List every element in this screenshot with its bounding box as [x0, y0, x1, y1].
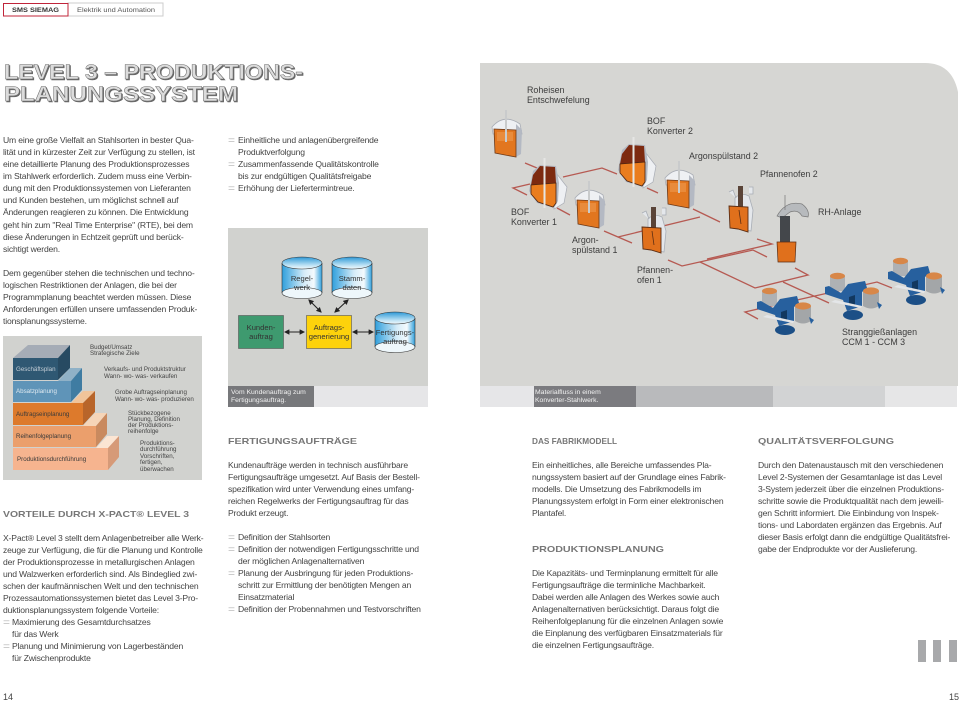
plant labels: Argon-	[572, 235, 599, 245]
text block: Produktionsplanung: Dabei werden alle Anlagen des Werkes sowie auch	[532, 592, 720, 602]
text block: Fabrikmodell: Plantafel.	[532, 508, 566, 518]
title	[4, 61, 303, 106]
text block: Vorteile: =	[3, 641, 10, 651]
plant labels: Konverter 2	[647, 126, 693, 136]
text block: intro: geht hin zum "Real Time Enterprise" (RTE), bei dem	[3, 220, 193, 230]
text block: Qualitätsverfolgung: tions- und Labordaten ergänzen das Ergebnis. Auf	[758, 520, 942, 530]
text block: Vorteile: für Zwischenprodukte	[12, 653, 91, 663]
text block: Produktionsplanung: Fertigungsaufträge die terminliche Machbarkeit.	[532, 580, 706, 590]
vessel: BOF Konverter 2	[618, 137, 656, 188]
text block: Qualitätsverfolgung: schritte sowie die Produktqualität nach dem jeweili-	[758, 496, 944, 506]
text block: Vorteile: Prozessautomationssystemen bietet das Level 3-Pro-	[3, 593, 198, 603]
step: Geschäftsplan: Geschäftsplan	[16, 366, 56, 373]
cylinder: Regelwerk	[282, 257, 322, 298]
vessel: RH-Anlage	[777, 195, 808, 262]
text block: Qualitätsverfolgung	[758, 460, 951, 554]
labels: planning levels: Wann- wo- was- produzieren	[115, 396, 194, 403]
heading: Qualitätsverfolgung: QUALITÄTSVERFOLGUNG	[758, 436, 894, 446]
text block: Fertigungsaufträge: spezifikation wird unter Verwendung eines umfang-	[228, 484, 414, 494]
text block: intro: Änderungen reagieren zu können. Die Entwicklung	[3, 207, 189, 217]
text block: Fertigungsaufträge: Definition der Probennahmen und Testvorschriften	[238, 604, 421, 614]
step: Reihenfolgeplanung	[13, 413, 107, 447]
plant labels: Konverter 1	[511, 217, 557, 227]
text block: intro: lität und in kürzester Zeit zur Verfügung zu stellen, ist	[3, 147, 196, 157]
box: Auftragsgenerierung	[306, 316, 352, 348]
plant labels: Roheisen	[527, 85, 565, 95]
text block: Vorteile: duktionsplanungssystem folgende Vorteile:	[3, 605, 159, 615]
text block: Fabrikmodell: Planungssystem erfolgt in Form einer elektronischen	[532, 496, 724, 506]
plant labels: RH-Anlage	[818, 207, 861, 217]
cylinder: Fertigungsauftrag: Fertigungs-	[376, 328, 415, 337]
text block: restrictions: tionsplanungssysteme.	[3, 316, 87, 326]
text block: Fertigungsaufträge: =	[228, 604, 235, 614]
material flow lines	[513, 163, 892, 319]
caption: material flow: Materialfluss in einem	[535, 389, 601, 396]
labels: planning levels: fertigen,	[140, 459, 163, 466]
step: Geschäftsplan	[13, 345, 70, 380]
text block: benefits list: =	[228, 135, 235, 145]
text block: Fabrikmodell: Ein einheitliches, alle Bereiche umfassendes Pla-	[532, 460, 712, 470]
cylinder: Regelwerk: Regel-	[291, 274, 314, 283]
text block: Fabrikmodell: modells. Die Umsetzung des Fabrikmodells im	[532, 484, 701, 494]
text block: Produktionsplanung: die Einplanung des verfügbaren Einsatzmaterials für	[532, 628, 723, 638]
text block: Produktionsplanung: Die Kapazitäts- und Terminplanung ermittelt für alle	[532, 568, 718, 578]
caster: CCM 2	[825, 273, 882, 320]
step: Auftragseinplanung	[13, 391, 95, 425]
vessel: BOF Konverter 1	[529, 158, 567, 209]
step: Absatzplanung	[13, 368, 82, 402]
labels: planning levels: reihenfolge	[128, 428, 159, 435]
text block: intro: und Kunden bestehen, um möglichst schnell auf	[3, 195, 179, 205]
text block: intro: im Stahlwerk erforderlich. Zudem muss eine Verbin-	[3, 171, 192, 181]
text block: Qualitätsverfolgung: 3-System jederzeit über die einzelnen Produktions-	[758, 484, 944, 494]
heading: Produktionsplanung: PRODUKTIONSPLANUNG	[532, 545, 664, 554]
labels: planning levels: durchführung	[140, 446, 177, 453]
text block: Fertigungsaufträge: Definition der notwendigen Fertigungsschritte und	[238, 544, 419, 554]
labels: planning levels: Stückbezogene	[128, 410, 171, 417]
text block: intro: eine detaillierte Planung des Produktionsprozesses	[3, 159, 189, 169]
step: Absatzplanung: Absatzplanung	[16, 388, 57, 395]
labels: planning levels: Wann- wo- was- verkaufen	[104, 373, 178, 380]
text block: benefits list: Einheitliche und anlagenübergreifende	[238, 135, 379, 145]
labels: planning levels	[90, 344, 194, 473]
text block: benefits list: Zusammenfassende Qualitätskontrolle	[238, 159, 379, 169]
vessel: Roheisen Entschwefelung	[492, 110, 522, 157]
box: Kundenauftrag: auftrag	[249, 332, 273, 341]
text block: Vorteile: =	[3, 617, 10, 627]
vessel: Pfannenofen 2	[729, 186, 753, 232]
text block: Fertigungsaufträge: der möglichen Anlagenalternativen	[238, 556, 365, 566]
text block: Fertigungsaufträge: Produkt erzeugt.	[228, 508, 288, 518]
text block: Fertigungsaufträge: Planung der Ausbringung für jeden Produktions-	[238, 568, 413, 578]
text block: intro: diese Änderungen in Echtzeit geprüft und berück-	[3, 232, 184, 242]
text block: benefits list: Erhöhung der Liefertermintreue.	[238, 183, 355, 193]
text block: Vorteile: der Produktionsprozesse in metallurgischen Anlagen	[3, 557, 195, 567]
text block: benefits list: =	[228, 183, 235, 193]
text block: Vorteile: schen der kaufmännischen Welt und den technischen	[3, 581, 199, 591]
text block: Fertigungsaufträge: Einsatzmaterial	[238, 592, 294, 602]
text block: Fertigungsaufträge: =	[228, 544, 235, 554]
plant labels	[511, 85, 917, 347]
step: Auftragseinplanung: Auftragseinplanung	[16, 411, 70, 418]
text block: Vorteile: und Walzwerken erforderlich sind. Als Bindeglied zwi-	[3, 569, 197, 579]
text block: Fertigungsaufträge: Definition der Stahlsorten	[238, 532, 330, 542]
labels: planning levels: der Produktions-	[128, 422, 173, 429]
text block: benefits list: Produktverfolgung	[238, 147, 305, 157]
text block: intro	[3, 135, 196, 254]
text block: Vorteile: zeuge zur Verfügung, die für die Planung und Kontrolle	[3, 545, 203, 555]
text block: Vorteile: für das Werk	[12, 629, 59, 639]
arrows between nodes	[285, 300, 373, 332]
plant labels: Pfannenofen 2	[760, 169, 818, 179]
step: Reihenfolgeplanung: Reihenfolgeplanung	[16, 433, 72, 440]
text block: benefits list: bis zur endgültigen Qualitätsfreigabe	[238, 171, 372, 181]
box: Kundenauftrag: Kunden-	[247, 323, 276, 332]
text block: benefits list: =	[228, 159, 235, 169]
heading: Das Fabrikmodell: DAS FABRIKMODELL	[532, 437, 617, 446]
text block: Fertigungsaufträge: =	[228, 568, 235, 578]
text block: Vorteile	[3, 533, 204, 663]
text block: Fertigungsaufträge: reichen Regelwerks der Fertigungsauftrag für das	[228, 496, 409, 506]
text block: Qualitätsverfolgung: gabe der Endprodukte vor der Auslieferung.	[758, 544, 917, 554]
page number 15: 15	[949, 692, 959, 702]
box: Auftragsgenerierung: generierung	[309, 332, 349, 341]
text block: Qualitätsverfolgung: dieser Basis erfolgt dann die endgültige Qualitätsfrei-	[758, 532, 951, 542]
panel: order generation diagram	[228, 228, 428, 386]
vessel: Argonspülstand 2	[665, 161, 695, 208]
cylinder: Fertigungsauftrag	[375, 312, 415, 352]
text block: Fabrikmodell: nungssystem basiert auf der Grundlage eines Fabrik-	[532, 472, 726, 482]
panel: steel plant material flow	[480, 63, 958, 386]
plant labels: Entschwefelung	[527, 95, 590, 105]
text block: Qualitätsverfolgung: gen Schritt informiert. Die Einbindung von Inspek-	[758, 508, 939, 518]
plant labels: CCM 1 - CCM 3	[842, 337, 905, 347]
caster: CCM 1	[757, 288, 814, 335]
cylinder: Stammdaten	[332, 257, 372, 298]
box: Auftragsgenerierung: Auftrags-	[314, 323, 345, 332]
caster: CCM 3	[888, 258, 945, 305]
text block: restrictions: Programmplanung beachtet werden müssen. Diese	[3, 292, 192, 302]
plant labels: Argonspülstand 2	[689, 151, 758, 161]
heading: Vorteile: VORTEILE DURCH X-PACT® LEVEL 3	[3, 510, 190, 519]
step: Produktionsdurchführung: Produktionsdurchführung	[17, 456, 87, 463]
heading: Fertigungsaufträge: FERTIGUNGSAUFTRÄGE	[228, 436, 358, 446]
text block: Fertigungsaufträge: Kundenaufträge werden in technisch ausführbare	[228, 460, 408, 470]
text block: Produktionsplanung: Reihenfolgeplanung für die einzelnen Anlagen sowie	[532, 616, 724, 626]
text block: Fertigungsaufträge: Fertigungsaufträge umgesetzt. Auf Basis der Bestell-	[228, 472, 420, 482]
division name: Elektrik und Automation	[77, 7, 156, 14]
vessel: Pfannenofen 1	[642, 207, 666, 253]
caption: material flow	[480, 386, 957, 407]
text block: Produktionsplanung: Anlagenalternativen berücksichtigt. Daraus folgt die	[532, 604, 719, 614]
text block: Fabrikmodell	[532, 460, 726, 518]
text block: Vorteile: Planung und Minimierung von Lagerbeständen	[12, 641, 183, 651]
text block: intro: sichtigt werden.	[3, 244, 60, 254]
labels: planning levels: Vorschriften,	[140, 453, 175, 460]
labels: planning levels: Budget/Umsatz	[90, 344, 132, 351]
caption: order diagram: Vom Kundenauftrag zum	[231, 389, 306, 396]
text block: Vorteile: X-Pact® Level 3 stellt dem Anlagenbetreiber alle Werk-	[3, 533, 204, 543]
labels: planning levels: Verkaufs- und Produktstruktur	[104, 366, 186, 373]
plant labels: BOF	[511, 207, 530, 217]
text block: restrictions	[3, 268, 198, 326]
caption: order diagram: Fertigungsauftrag.	[231, 397, 286, 404]
page number 14: 14	[3, 692, 13, 702]
text block: Fertigungsaufträge: =	[228, 532, 235, 542]
cylinder: Fertigungsauftrag: auftrag	[383, 337, 407, 346]
title: LEVEL 3 – PRODUKTIONS-	[4, 61, 303, 84]
vessel: Argonspülstand 1	[575, 181, 605, 228]
labels: planning levels: Produktions-	[140, 440, 175, 447]
text block: intro: dung mit den Produktionssystemen von Lieferanten	[3, 183, 191, 193]
text block: intro: Um eine große Vielfalt an Stahlsorten in bester Qua-	[3, 135, 194, 145]
plant labels: spülstand 1	[572, 245, 617, 255]
icon: section bars	[918, 640, 957, 662]
labels: planning levels: Grobe Auftragseinplanung	[115, 389, 187, 396]
labels: planning levels: Planung, Definition	[128, 416, 180, 423]
text block: Fertigungsaufträge: schritt zur Ermittlung der benötigten Mengen an	[238, 580, 411, 590]
text block: Fertigungsaufträge	[228, 460, 421, 614]
title: PLANUNGSSYSTEM	[4, 83, 238, 106]
text block: Produktionsplanung: die einzelnen Fertigungsaufträge.	[532, 640, 654, 650]
labels: planning levels: Strategische Ziele	[90, 350, 140, 357]
plant labels: Pfannen-	[637, 265, 673, 275]
plant labels: BOF	[647, 116, 666, 126]
logo name: SMS SIEMAG	[12, 7, 59, 14]
box: Kundenauftrag	[238, 316, 284, 348]
text block: Vorteile: Maximierung des Gesamtdurchsatzes	[12, 617, 151, 627]
text block: benefits list	[228, 135, 379, 193]
plant labels: ofen 1	[637, 275, 662, 285]
header logo bar	[4, 3, 163, 16]
text block: Produktionsplanung	[532, 568, 724, 650]
cylinder: Stammdaten: Stamm-	[339, 274, 366, 283]
plant labels: Stranggießanlagen	[842, 327, 917, 337]
text block: restrictions: logischen Restriktionen der Anlagen, die bei der	[3, 280, 177, 290]
cylinder: Regelwerk: werk	[293, 283, 310, 292]
text block: restrictions: Dem gegenüber stehen die technischen und techno-	[3, 268, 195, 278]
cylinder: Stammdaten: daten	[342, 283, 362, 292]
text block: restrictions: Anforderungen erfüllen unsere umfassenden Produk-	[3, 304, 198, 314]
text block: Qualitätsverfolgung: Durch den Datenaustausch mit den verschiedenen	[758, 460, 944, 470]
text block: Qualitätsverfolgung: Level 2-Systemen der Gesamtanlage ist das Level	[758, 472, 942, 482]
caption: material flow: Konverter-Stahlwerk.	[535, 397, 599, 404]
caption: order diagram	[228, 386, 428, 407]
panel: planning pyramid	[3, 336, 202, 480]
step: Produktionsdurchführung	[13, 436, 119, 470]
labels: planning levels: überwachen	[140, 466, 174, 473]
